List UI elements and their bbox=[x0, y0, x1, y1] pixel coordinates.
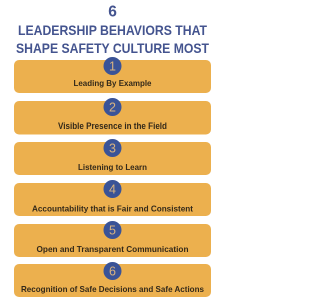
panel: behavior 6 bbox=[14, 262, 211, 297]
panel: behavior 1 bbox=[14, 57, 211, 93]
panel: behavior 2: Visible Presence in the Field bbox=[58, 121, 167, 131]
panel: behavior 2: 2 bbox=[109, 100, 116, 114]
panel: behavior 6: Recognition of Safe Decisions and Safe Actions bbox=[21, 284, 204, 294]
panel: behavior 6: 6 bbox=[109, 264, 116, 278]
panel: behavior 3: Listening to Learn bbox=[78, 162, 147, 172]
panel: behavior 1: Leading By Example bbox=[74, 78, 152, 88]
title bbox=[16, 4, 209, 56]
panel: behavior 1: 1 bbox=[109, 60, 116, 74]
panel: behavior 4: Accountability that is Fair and Consistent bbox=[32, 204, 193, 214]
panel: behavior 5: 5 bbox=[109, 224, 116, 238]
panel: behavior 5 bbox=[14, 221, 211, 257]
panel: behavior 5: Open and Transparent Communication bbox=[36, 244, 188, 254]
panel: behavior 3: 3 bbox=[109, 142, 116, 156]
panel: behavior 4 bbox=[14, 180, 211, 216]
panel: behavior 3 bbox=[14, 139, 211, 175]
panel: behavior 4: 4 bbox=[109, 182, 116, 196]
title: 6 bbox=[108, 4, 117, 20]
panel: behavior 2 bbox=[14, 98, 211, 134]
